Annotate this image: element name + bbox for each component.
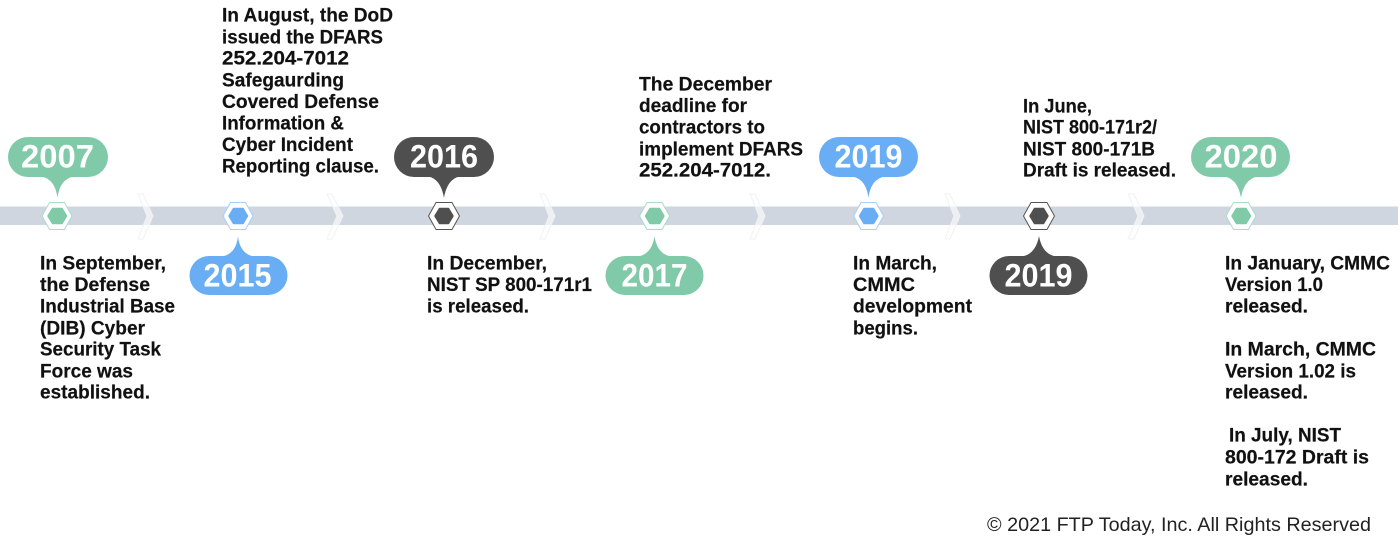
text: 2015 event: Safegaurding bbox=[222, 70, 344, 92]
text: 2007 event: (DIB) Cyber bbox=[40, 318, 146, 340]
text: 2007 event: established. bbox=[40, 382, 150, 404]
text: 2007 event bbox=[40, 254, 175, 404]
text: 2007 event: In September, bbox=[40, 254, 166, 274]
text: 2020 events: In July, NIST bbox=[1229, 426, 1341, 446]
text: 2019 March event: In March, bbox=[853, 254, 937, 274]
marker 2020 bbox=[1191, 137, 1290, 230]
text: 2015 event: issued the DFARS bbox=[222, 28, 383, 48]
text: 2020 events: In January, CMMC bbox=[1225, 254, 1390, 274]
marker 2019 June: 2019 bbox=[1004, 258, 1072, 294]
text: 2016 event: is released. bbox=[427, 296, 529, 318]
text: 2020 events: released. bbox=[1225, 296, 1308, 318]
text: 2019 March event: development bbox=[853, 296, 973, 318]
chevron arrows bbox=[138, 194, 1144, 239]
text: 2016 event: NIST SP 800-171r1 bbox=[427, 275, 592, 296]
text: 2019 June event bbox=[1023, 96, 1176, 182]
text: 2015 event: Covered Defense bbox=[222, 92, 379, 113]
text: 2007 event: Security Task bbox=[40, 340, 161, 360]
text: 2015 event: Information & bbox=[222, 114, 344, 134]
marker 2019 March: 2019 bbox=[834, 138, 902, 174]
text: 2019 March event bbox=[853, 254, 973, 340]
text: 2019 March event: begins. bbox=[853, 318, 918, 340]
timeline band bbox=[0, 206, 1398, 225]
text: 2019 June event: In June, bbox=[1023, 96, 1092, 118]
text: 2015 event: In August, the DoD bbox=[222, 6, 393, 26]
marker 2016: 2016 bbox=[410, 138, 478, 174]
text: 2020 events: Version 1.0 bbox=[1225, 275, 1323, 296]
text: 2020 events: released. bbox=[1225, 382, 1308, 404]
text: 2007 event: the Defense bbox=[40, 275, 150, 296]
text: 2015 event: Reporting clause. bbox=[222, 156, 379, 178]
marker 2017: 2017 bbox=[622, 258, 688, 294]
copyright: © 2021 FTP Today, Inc. All Rights Reserved bbox=[987, 514, 1371, 536]
text: 2020 events: Version 1.02 is bbox=[1225, 362, 1356, 382]
text: 2007 event: Force was bbox=[40, 362, 133, 382]
text: 2017 event: 252.204-7012. bbox=[639, 160, 771, 182]
marker 2016 bbox=[394, 137, 494, 230]
text: 2015 event: 252.204-7012 bbox=[222, 48, 349, 70]
text: 2017 event: contractors to bbox=[639, 118, 765, 138]
text: 2015 event bbox=[222, 6, 393, 178]
marker 2020: 2020 bbox=[1204, 138, 1278, 174]
marker 2019 June bbox=[990, 202, 1088, 295]
text: 2016 event: In December, bbox=[427, 254, 547, 274]
text: 2020 events bbox=[1225, 254, 1390, 490]
text: 2017 event: deadline for bbox=[639, 96, 748, 117]
marker 2017 bbox=[606, 202, 704, 295]
marker 2007 bbox=[8, 137, 108, 230]
marker 2019 March bbox=[819, 137, 918, 230]
text: 2020 events: In March, CMMC bbox=[1225, 340, 1376, 360]
text: 2020 events: released. bbox=[1225, 470, 1308, 490]
marker 2015: 2015 bbox=[204, 258, 272, 294]
marker 2015 bbox=[190, 202, 288, 295]
text: 2019 June event: NIST 800-171B bbox=[1023, 140, 1155, 160]
text: 2019 June event: Draft is released. bbox=[1023, 160, 1176, 182]
text: 2017 event: The December bbox=[639, 74, 773, 96]
text: 2017 event bbox=[639, 74, 803, 182]
text: 2016 event bbox=[427, 254, 592, 318]
text: 2020 events: 800-172 Draft is bbox=[1225, 448, 1369, 468]
text: 2019 March event: CMMC bbox=[853, 275, 915, 296]
text: 2017 event: implement DFARS bbox=[639, 140, 803, 160]
marker 2007: 2007 bbox=[21, 138, 94, 174]
text: 2007 event: Industrial Base bbox=[40, 296, 175, 318]
text: 2015 event: Cyber Incident bbox=[222, 135, 354, 156]
text: 2019 June event: NIST 800-171r2/ bbox=[1023, 118, 1158, 138]
